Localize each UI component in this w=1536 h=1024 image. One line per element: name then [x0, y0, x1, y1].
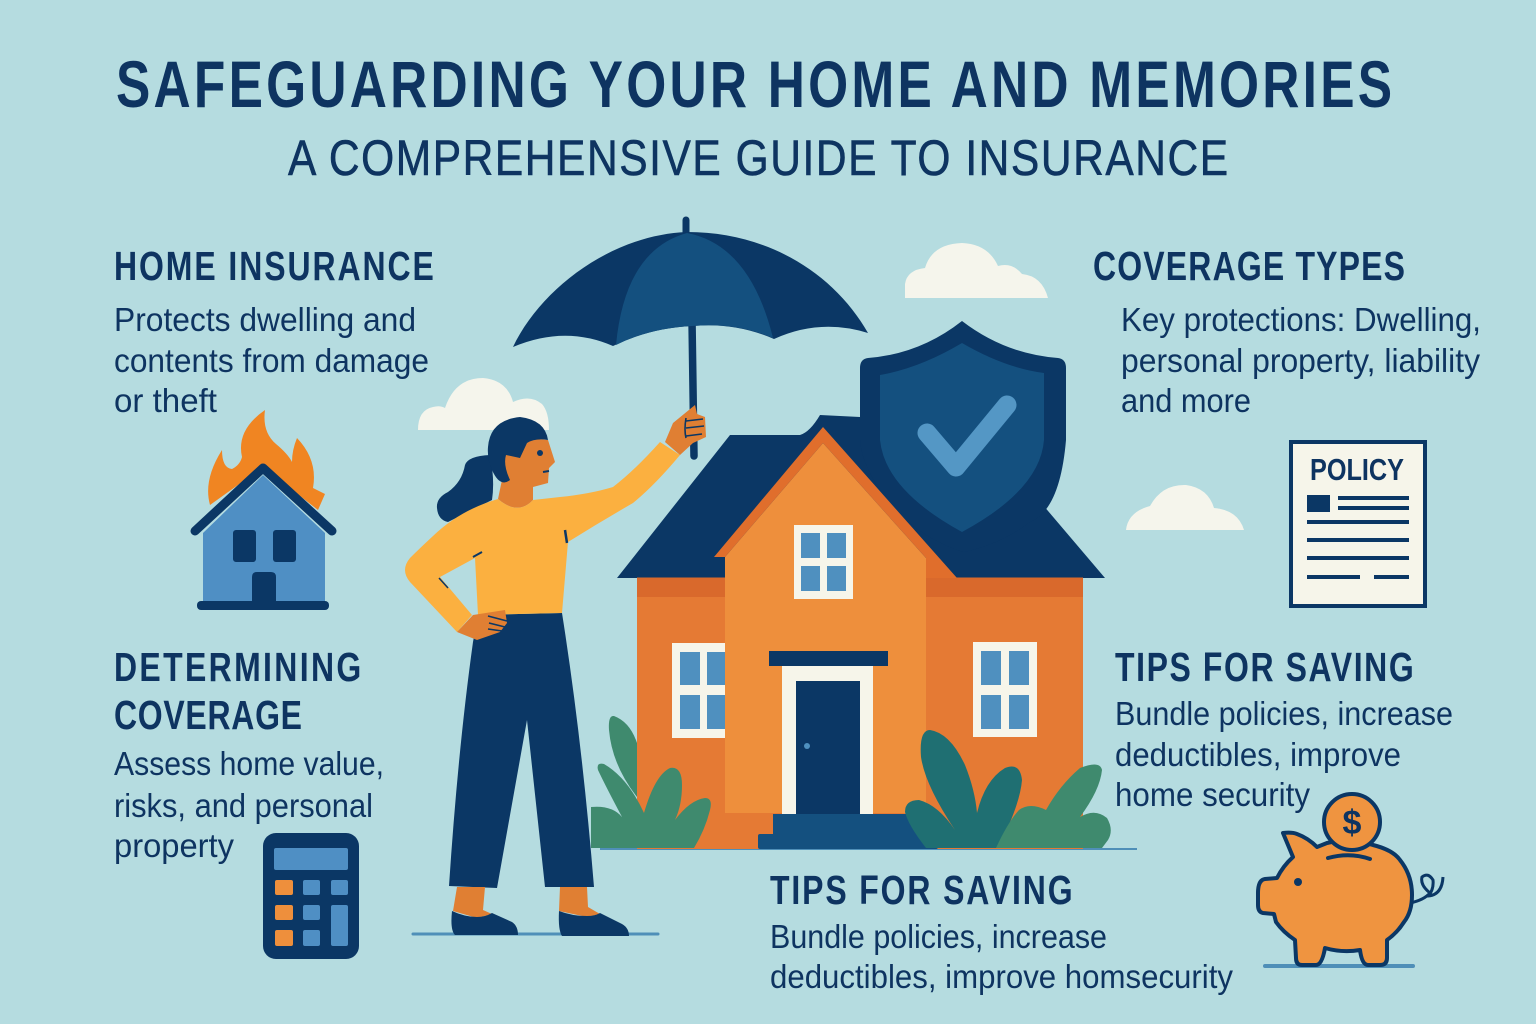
text block: determining coverage: COVERAGE — [114, 692, 302, 738]
shield — [860, 321, 1066, 552]
person: neck and head — [498, 438, 555, 508]
icon: piggy bank: $ — [1343, 804, 1362, 842]
plants: left — [591, 716, 711, 848]
umbrella — [513, 220, 868, 456]
text block: determining coverage: Assess home value, — [114, 745, 384, 782]
text block: tips for saving, right — [1115, 644, 1453, 813]
icon: piggy bank — [1258, 794, 1443, 966]
cloud: behind person — [418, 378, 549, 430]
ground line: house — [600, 848, 1137, 850]
text block: determining coverage: property — [114, 827, 234, 864]
plants: right — [905, 730, 1111, 848]
text block: coverage types — [1093, 243, 1481, 419]
title: SAFEGUARDING YOUR HOME AND MEMORIES — [116, 47, 1392, 121]
text block: tips for saving, right: home security — [1115, 776, 1310, 813]
person: raised hand — [665, 405, 706, 455]
person: shoes — [451, 911, 518, 935]
text block: tips for saving, right: deductibles, improve — [1115, 736, 1401, 773]
subtitle: A COMPREHENSIVE GUIDE TO INSURANCE — [288, 130, 1228, 186]
person: ankles — [453, 887, 600, 918]
text block: tips for saving, right: Bundle policies, increase — [1115, 695, 1453, 732]
text block: tips for saving, right: TIPS FOR SAVING — [1115, 644, 1414, 690]
house: main roof — [617, 415, 1105, 578]
cloud: top right — [905, 243, 1048, 298]
text block: tips for saving, bottom — [770, 867, 1233, 995]
text block: determining coverage — [114, 644, 384, 864]
person: ponytail — [437, 455, 493, 522]
house: left window — [672, 643, 725, 738]
icon: policy document — [1291, 442, 1425, 606]
icon: policy document: POLICY — [1310, 452, 1404, 487]
icon: house on fire — [195, 410, 332, 610]
text block: coverage types: Key protections: Dwelling, — [1121, 301, 1481, 338]
text block: coverage types: COVERAGE TYPES — [1093, 243, 1405, 289]
house: front gable — [725, 443, 926, 813]
ground line: person — [413, 932, 658, 936]
house — [617, 321, 1105, 849]
text block: tips for saving, bottom: TIPS FOR SAVING — [770, 867, 1073, 913]
person: legs — [449, 613, 594, 888]
house: door — [769, 651, 888, 814]
person — [405, 405, 706, 936]
person: sleeve creases — [439, 530, 567, 588]
text block: home insurance: contents from damage — [114, 342, 429, 379]
text block: home insurance — [114, 243, 434, 419]
cloud: right — [1126, 485, 1244, 530]
text block: home insurance: or theft — [114, 382, 217, 419]
text block: determining coverage: risks, and personal — [114, 787, 373, 824]
person: eye and mouth — [537, 450, 549, 472]
house: side walls — [637, 578, 1083, 849]
person: hand on hip — [457, 610, 507, 640]
house: steps — [758, 814, 938, 849]
icon: calculator — [263, 833, 359, 959]
text block: home insurance: Protects dwelling and — [114, 301, 416, 338]
text block: determining coverage: DETERMINING — [114, 644, 361, 690]
house: upper window — [794, 525, 853, 599]
text block: tips for saving, bottom: deductibles, improve homsecurity — [770, 958, 1233, 995]
text block: tips for saving, bottom: Bundle policies, increase — [770, 918, 1107, 955]
house: right window — [973, 642, 1037, 737]
text block: coverage types: and more — [1121, 382, 1251, 419]
person: hair — [488, 417, 548, 482]
house: wall shadow band — [637, 578, 1083, 597]
text block: home insurance: HOME INSURANCE — [114, 243, 434, 289]
text block: coverage types: personal property, liability — [1121, 342, 1480, 379]
person: torso and arms — [405, 442, 680, 632]
